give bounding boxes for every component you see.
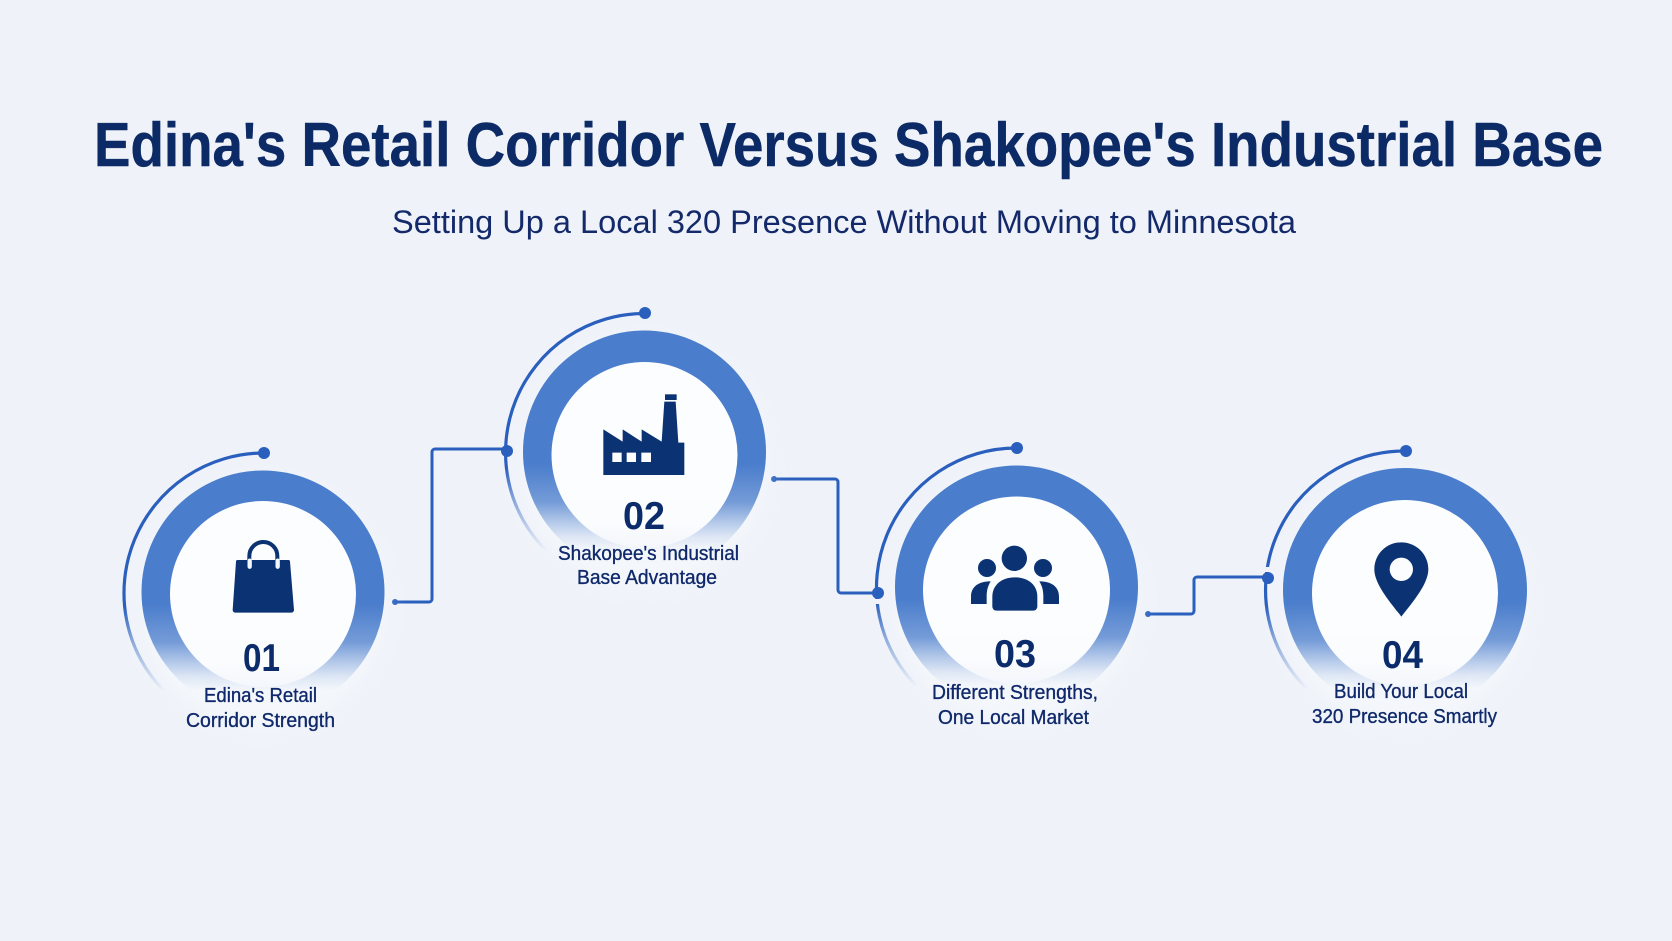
progress ring 01 <box>124 447 385 728</box>
panel: step 04 <box>1262 445 1527 728</box>
panel: step 01 <box>124 447 385 732</box>
label 04: Build Your Local <box>1334 681 1468 703</box>
label 04 <box>1312 681 1497 728</box>
label 04: 320 Presence Smartly <box>1312 706 1497 728</box>
number 03: 03 <box>994 633 1036 676</box>
progress ring 02 <box>501 307 766 588</box>
icon: map pin <box>1374 542 1428 617</box>
label 01: Corridor Strength <box>186 710 335 732</box>
connector: 02 to 03 <box>771 476 878 593</box>
connector: 01 to 02 <box>392 449 507 605</box>
icon: factory <box>603 394 684 475</box>
panel: step 03 <box>872 442 1138 729</box>
panel: step 02 <box>501 307 766 589</box>
label 02 <box>558 543 739 589</box>
number 04: 04 <box>1382 634 1423 677</box>
label 01: Edina's Retail <box>204 685 317 707</box>
label 03 <box>932 682 1098 729</box>
number 02: 02 <box>623 495 665 538</box>
subtitle: Setting Up a Local 320 Presence Without Moving to Minnesota <box>392 204 1296 240</box>
progress ring 03 <box>872 442 1138 723</box>
number 01: 01 <box>243 637 280 680</box>
icon: shopping bag <box>233 542 294 613</box>
label 01 <box>186 685 335 732</box>
label 03: Different Strengths, <box>932 682 1098 704</box>
connector: 03 to 04 <box>1145 577 1268 617</box>
progress ring 04 <box>1262 445 1527 726</box>
label 02: Shakopee's Industrial <box>558 543 739 565</box>
label 03: One Local Market <box>938 707 1089 729</box>
label 02: Base Advantage <box>577 567 717 589</box>
icon: group of people <box>971 546 1059 611</box>
